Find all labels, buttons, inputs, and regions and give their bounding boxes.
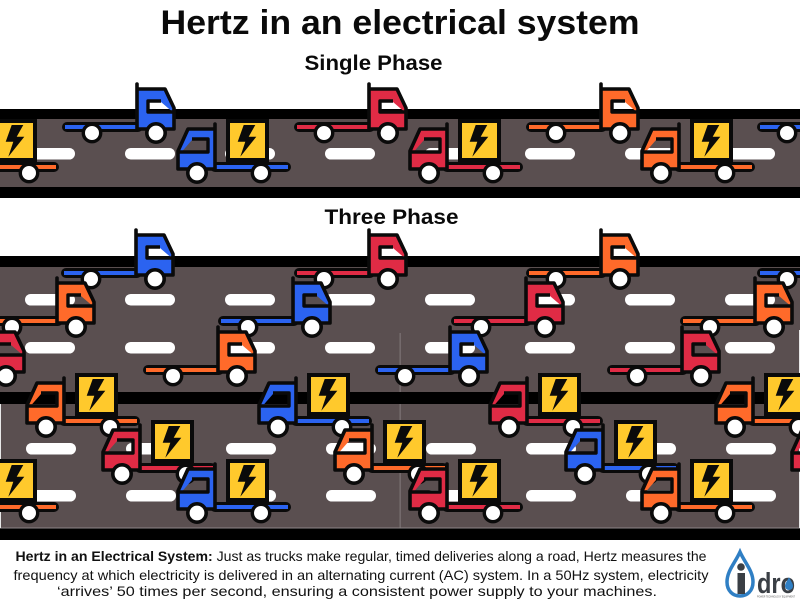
panel: single phase road (0, 109, 800, 198)
panel: three phase road (0, 256, 800, 540)
three phase lane 4: loaded trucks (27, 375, 800, 436)
three phase lane 1: empty trucks (64, 230, 800, 288)
caption text block: Hertz in an Electrical System: Just as trucks make regular, timed deliveries along a road, Hertz measures the (16, 548, 707, 564)
single phase lower lane: loaded trucks (0, 121, 752, 182)
heading: three phase: Three Phase (324, 206, 458, 229)
caption text block: ‘arrives’ 50 times per second, ensuring a consistent power supply to your machines. (57, 583, 657, 599)
three phase lane 6: loaded trucks (0, 461, 752, 522)
three phase lane 2: empty trucks (0, 278, 792, 336)
heading: single phase: Single Phase (304, 52, 442, 75)
three phase lane 5: loaded trucks (103, 422, 800, 483)
logo: idro (727, 552, 795, 600)
caption text block (14, 548, 709, 599)
single phase upper lane: empty trucks (65, 84, 800, 142)
three phase lane 3: empty trucks (0, 327, 719, 385)
caption text block: frequency at which electricity is delivered in an alternating current (AC) system. In a 50Hz system, electricity (14, 567, 709, 583)
title: Hertz in an electrical system (160, 4, 640, 42)
